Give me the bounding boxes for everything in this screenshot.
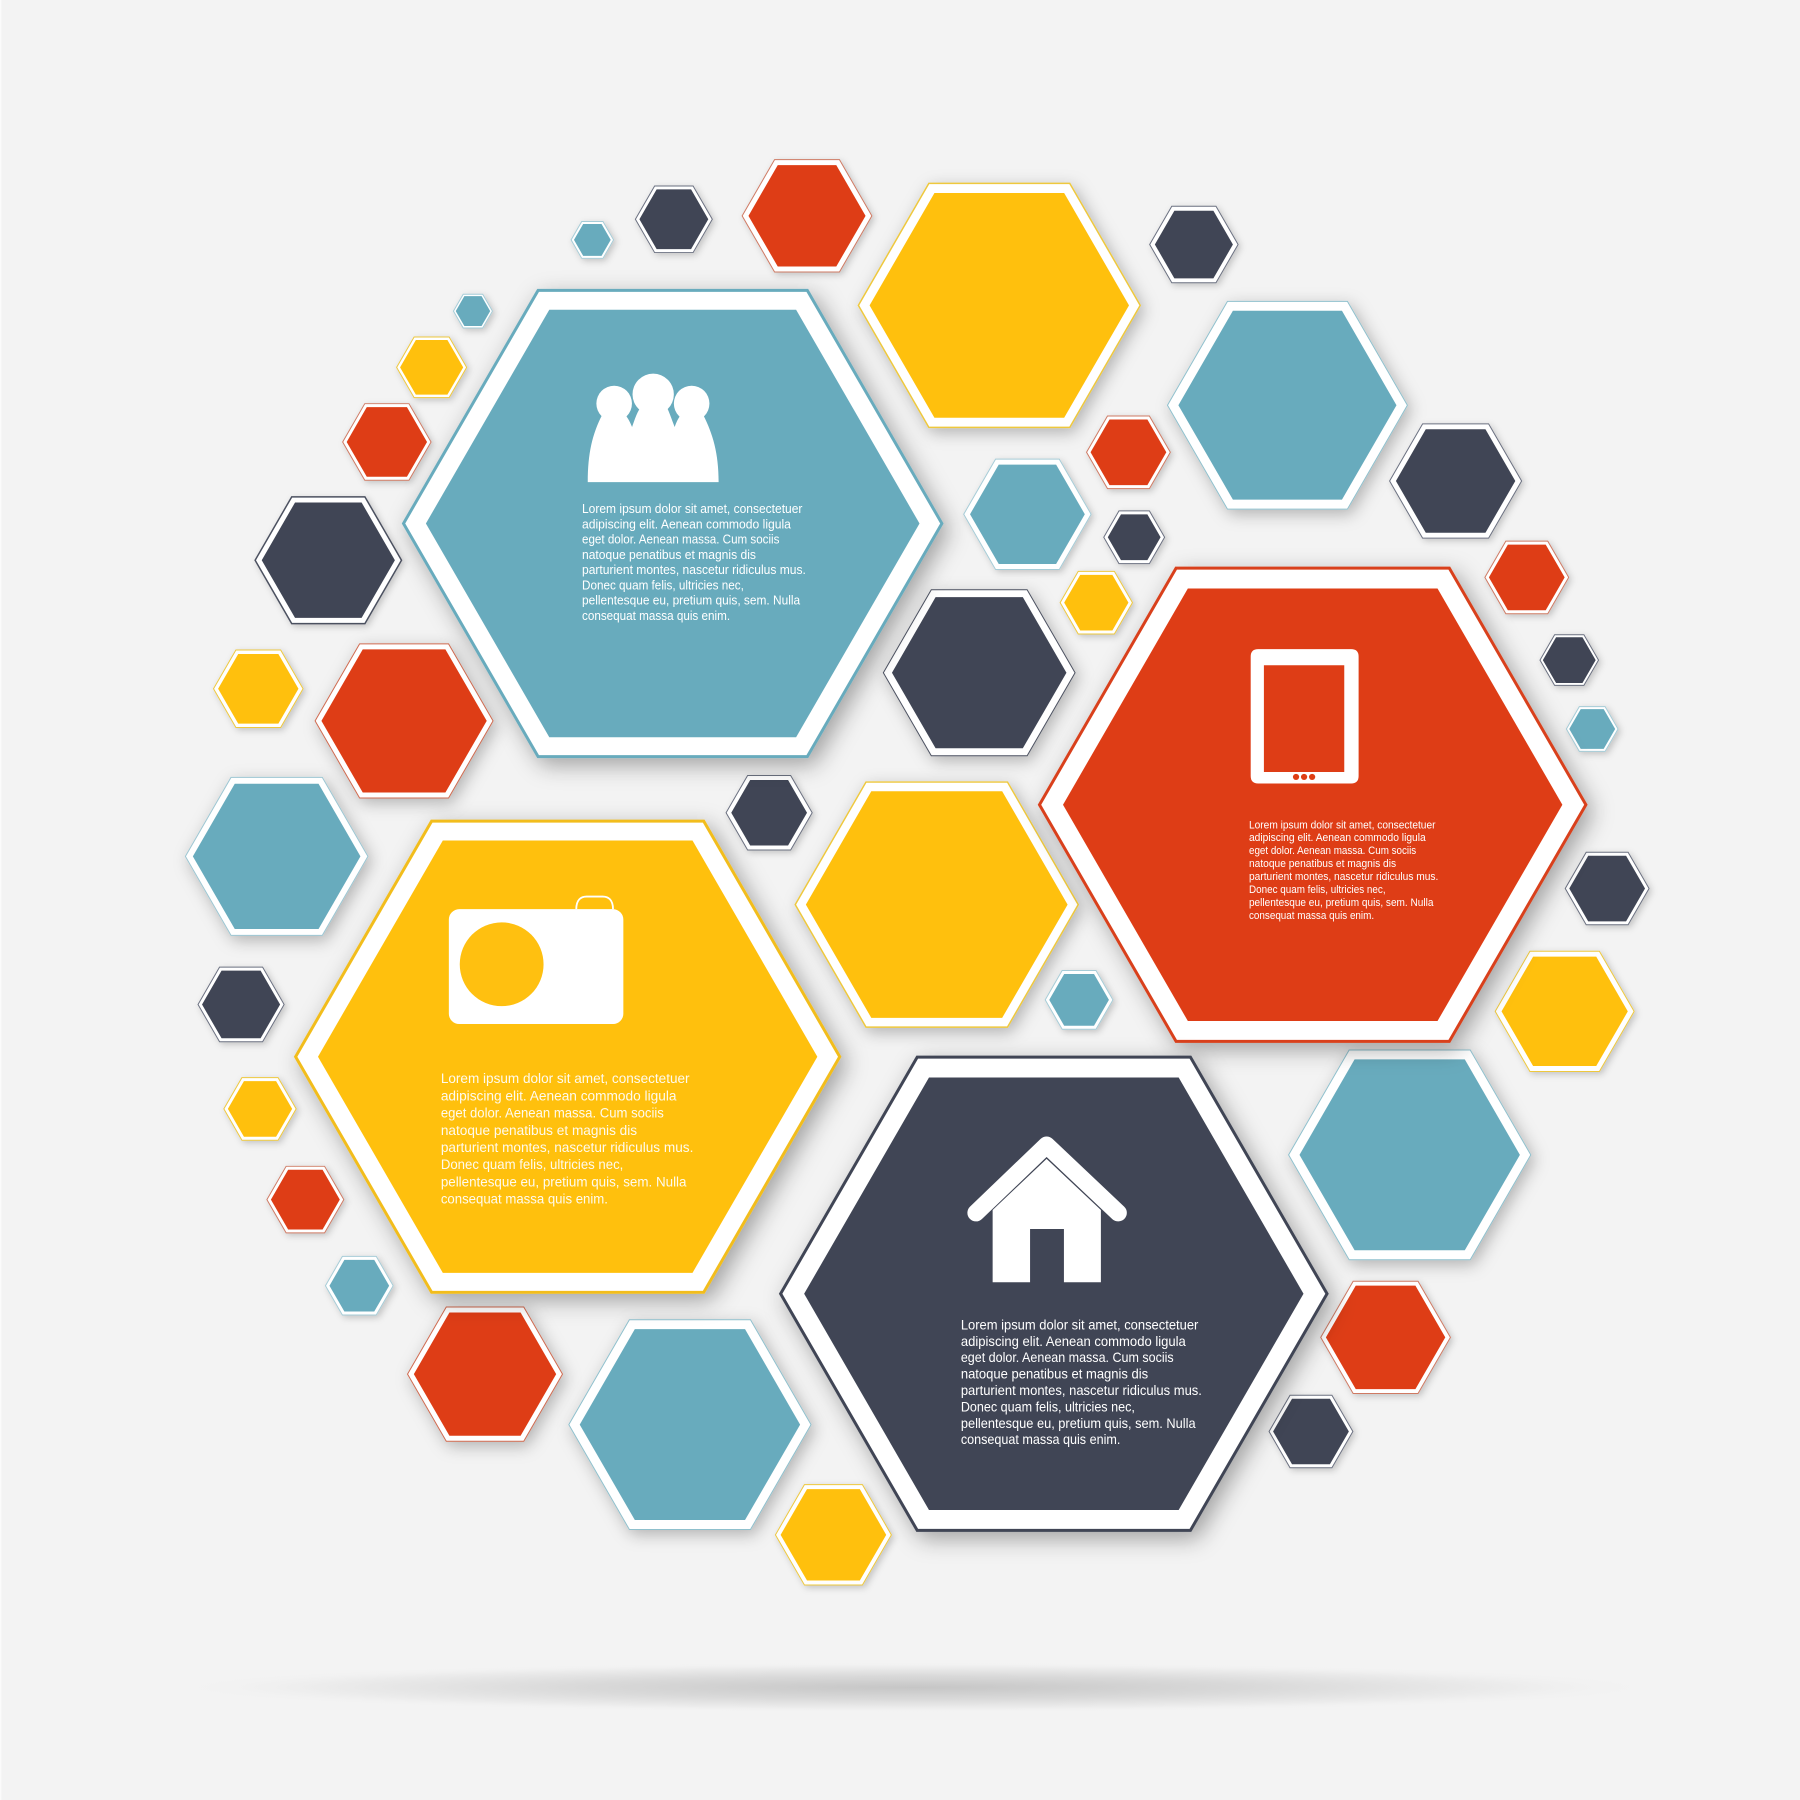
small hexagon: teal	[571, 221, 614, 259]
small hexagon: dark	[1389, 423, 1522, 539]
text block: dark panel: natoque penatibus et magnis dis	[961, 1367, 1148, 1382]
text block: yellow panel	[441, 1071, 693, 1208]
text block: red panel: Lorem ipsum dolor sit amet, consectetuer	[1249, 819, 1436, 831]
small hexagon: dark	[1539, 634, 1599, 686]
small hexagon: yellow	[1060, 571, 1133, 634]
text block: yellow panel: Donec quam felis, ultricies nec,	[441, 1157, 623, 1173]
text block: teal panel: Donec quam felis, ultricies nec,	[582, 578, 744, 592]
text block: teal panel: Lorem ipsum dolor sit amet, consectetuer	[582, 502, 802, 516]
small hexagon: dark	[1149, 206, 1239, 283]
text block: teal panel: parturient montes, nascetur ridiculus mus.	[582, 563, 806, 577]
hexagon: dark panel	[779, 1056, 1329, 1532]
panel: dark house	[779, 1056, 1329, 1532]
small hexagon: dark	[1103, 510, 1165, 564]
text block: dark panel: Lorem ipsum dolor sit amet, consectetuer	[961, 1317, 1199, 1332]
text block: red panel: Donec quam felis, ultricies nec,	[1249, 884, 1386, 896]
medium hexagon: dark	[883, 589, 1076, 756]
small hexagon: teal	[325, 1256, 394, 1316]
text block: red panel: consequat massa quis enim.	[1249, 910, 1374, 922]
icon: house	[976, 1145, 1118, 1282]
panel: yellow camera	[294, 820, 841, 1294]
text block: yellow panel: pellentesque eu, pretium quis, sem. Nulla	[441, 1174, 687, 1190]
panel: teal people	[402, 289, 944, 758]
small hexagon: dark	[726, 775, 813, 851]
small hexagon: red	[342, 403, 432, 481]
text block: yellow panel: Lorem ipsum dolor sit amet, consectetuer	[441, 1071, 690, 1087]
medium hexagon: dark	[254, 496, 402, 624]
text block: red panel: parturient montes, nascetur ridiculus mus.	[1249, 871, 1438, 883]
small hexagon: red	[742, 159, 872, 272]
text block: yellow panel: adipiscing elit. Aenean commodo ligula	[441, 1088, 677, 1104]
hexagon: red panel	[1038, 567, 1588, 1043]
medium hexagon: teal	[1288, 1049, 1531, 1260]
small hexagon: dark	[1565, 852, 1650, 925]
small hexagon: teal	[1566, 706, 1619, 752]
small hexagon: teal	[453, 294, 493, 328]
icon: camera	[449, 897, 623, 1024]
medium hexagon: yellow	[858, 183, 1141, 428]
text block: red panel: adipiscing elit. Aenean commodo ligula	[1249, 832, 1426, 844]
small hexagon: red	[1086, 416, 1171, 489]
text block: teal panel: adipiscing elit. Aenean commodo ligula	[582, 517, 792, 531]
small hexagon: yellow	[1495, 951, 1635, 1072]
small hexagon: yellow	[223, 1077, 297, 1141]
small hexagon: dark	[1268, 1395, 1353, 1468]
text block: dark panel: Donec quam felis, ultricies nec,	[961, 1399, 1135, 1414]
text block: dark panel: pellentesque eu, pretium quis, sem. Nulla	[961, 1416, 1196, 1431]
text block: teal panel: pellentesque eu, pretium quis, sem. Nulla	[582, 594, 801, 608]
medium hexagon: teal	[1167, 301, 1408, 510]
text block: red panel	[1249, 819, 1438, 922]
text block: red panel: eget dolor. Aenean massa. Cum sociis	[1249, 845, 1416, 857]
text block: red panel: natoque penatibus et magnis dis	[1249, 858, 1396, 870]
text block: dark panel: parturient montes, nascetur ridiculus mus.	[961, 1383, 1202, 1398]
text block: red panel: pellentesque eu, pretium quis, sem. Nulla	[1249, 897, 1434, 909]
medium hexagon: teal	[185, 777, 368, 936]
text block: yellow panel: parturient montes, nascetur ridiculus mus.	[441, 1140, 693, 1156]
small hexagon: red	[266, 1166, 344, 1233]
medium hexagon: yellow	[794, 781, 1079, 1028]
small hexagon: red	[1484, 541, 1569, 614]
medium hexagon: red	[407, 1307, 563, 1442]
small hexagon: yellow	[396, 337, 467, 398]
hexagon: yellow panel	[294, 820, 841, 1294]
text block: teal panel: natoque penatibus et magnis dis	[582, 548, 756, 562]
small hexagon: yellow	[775, 1484, 892, 1586]
text block: yellow panel: natoque penatibus et magnis dis	[441, 1123, 637, 1139]
text block: teal panel: consequat massa quis enim.	[582, 609, 730, 623]
text block: dark panel	[961, 1317, 1202, 1447]
small hexagon: dark	[197, 967, 285, 1042]
small hexagon: teal	[963, 459, 1092, 570]
text block: dark panel: adipiscing elit. Aenean commodo ligula	[961, 1334, 1186, 1349]
panel: red tablet	[1038, 567, 1588, 1043]
medium hexagon: teal	[568, 1319, 812, 1530]
hexagon: teal panel	[402, 289, 944, 758]
text block: teal panel: eget dolor. Aenean massa. Cum sociis	[582, 533, 779, 547]
icon: people	[588, 374, 719, 482]
text block: yellow panel: eget dolor. Aenean massa. Cum sociis	[441, 1106, 664, 1122]
text block: teal panel	[582, 502, 806, 623]
medium hexagon: red	[315, 643, 494, 798]
ground shadow	[169, 1662, 1661, 1713]
small hexagon: dark	[635, 185, 713, 253]
text block: yellow panel: consequat massa quis enim.	[441, 1192, 608, 1208]
icon: tablet	[1251, 649, 1359, 783]
text block: dark panel: eget dolor. Aenean massa. Cum sociis	[961, 1350, 1174, 1365]
small hexagon: red	[1320, 1281, 1451, 1394]
small hexagon: teal	[1045, 970, 1114, 1030]
small hexagon: yellow	[213, 650, 304, 728]
text block: dark panel: consequat massa quis enim.	[961, 1432, 1120, 1447]
